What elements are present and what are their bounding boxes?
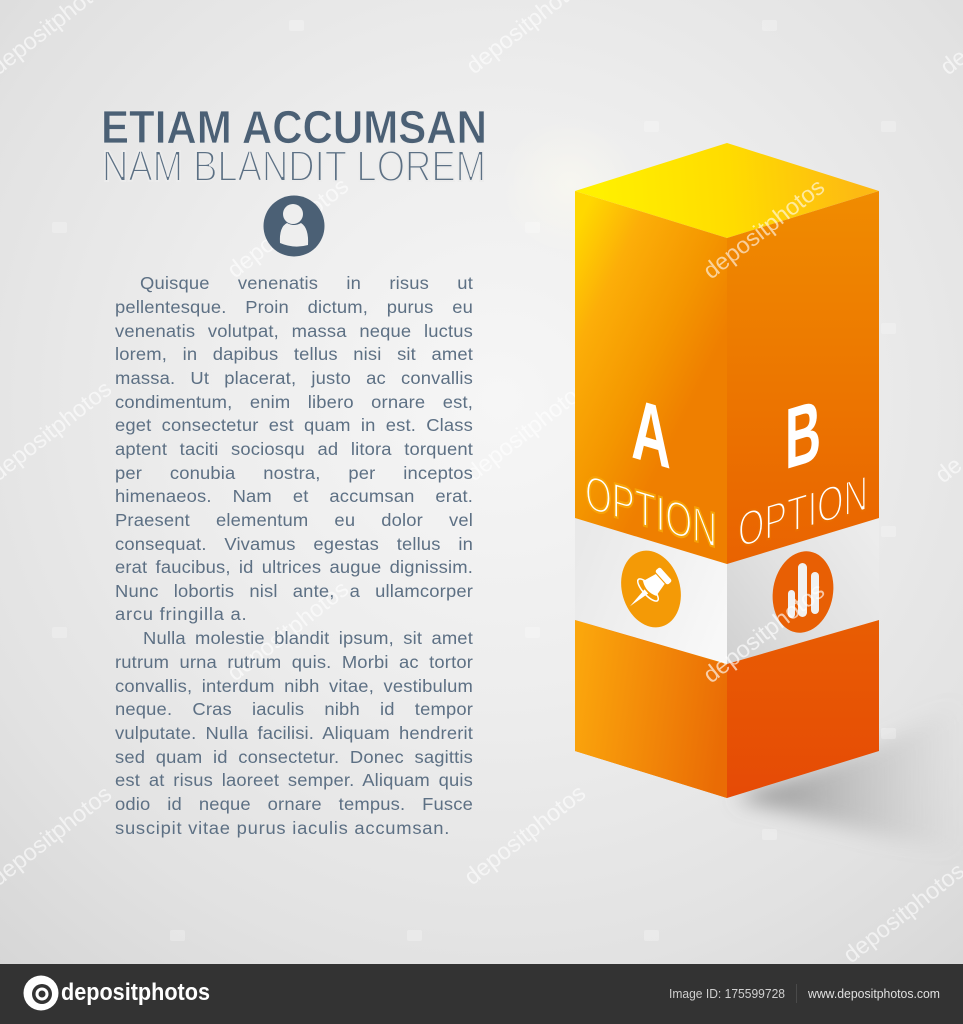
- body text: massa. Ut placerat, justo ac convallis: [115, 368, 473, 388]
- box watermark top: depositphotos: [698, 173, 829, 284]
- body text: pellentesque. Proin dictum, purus eu: [115, 297, 473, 317]
- body text: condimentum, enim libero ornare est,: [115, 392, 473, 412]
- body text: lorem, in dapibus tellus nisi sit amet: [115, 344, 473, 364]
- watermarks: depositphotos: [459, 779, 590, 890]
- body text: himenaeos. Nam et accumsan erat.: [115, 486, 473, 506]
- subtitle: NAM BLANDIT LOREM: [102, 142, 486, 191]
- body text: Nunc lobortis nisl ante, a ullamcorper: [115, 581, 473, 601]
- logo mark: [24, 976, 58, 1010]
- logo wordmark: depositphotos: [61, 979, 210, 1006]
- body text: neque. Cras iaculis nibh id tempor: [115, 699, 473, 719]
- watermarks: depositphotos: [222, 575, 353, 686]
- watermark camera marks: [52, 20, 896, 941]
- body text: Praesent elementum eu dolor vel: [115, 510, 473, 530]
- body text: venenatis volutpat, massa neque luctus: [115, 321, 473, 341]
- body text: arcu fringilla a.: [115, 604, 247, 624]
- letter A: A: [631, 381, 671, 488]
- icon: bar chart: [766, 546, 840, 638]
- white band right: [727, 518, 879, 664]
- watermarks: depositphotos: [461, 375, 592, 486]
- icon: person: [264, 196, 324, 256]
- option label A: OPTION: [585, 464, 717, 558]
- body text: est at risus laoreet semper. Aliquam quis: [115, 770, 473, 790]
- body text: Nulla molestie blandit ipsum, sit amet: [143, 628, 473, 648]
- footer bar: [0, 964, 963, 1024]
- body text: sed quam id consectetur. Donec sagittis: [115, 747, 473, 767]
- watermarks: depositphotos: [222, 172, 353, 283]
- body text: aptent taciti sociosqu ad litora torquent: [115, 439, 473, 459]
- body text: odio id neque ornare tempus. Fusce: [115, 794, 473, 814]
- image id: Image ID: 175599728: [669, 987, 785, 1001]
- box left face: [575, 191, 727, 798]
- white band left: [575, 518, 727, 664]
- box shadow: [736, 732, 930, 839]
- body text: eget consectetur est quam in est. Class: [115, 415, 473, 435]
- box right face: [727, 191, 879, 798]
- body text: rutrum urna rutrum quis. Morbi ac tortor: [115, 652, 473, 672]
- body text: Quisque venenatis in risus ut: [140, 273, 473, 293]
- website: www.depositphotos.com: [807, 987, 940, 1001]
- body text: convallis, interdum nibh vitae, vestibulum: [115, 676, 473, 696]
- option label B: OPTION: [738, 465, 868, 559]
- body text: per conubia nostra, per inceptos: [115, 463, 473, 483]
- body text: vulputate. Nulla facilisi. Aliquam hendrerit: [115, 723, 473, 743]
- body text: [115, 273, 473, 838]
- body text: suscipit vitae purus iaculis accumsan.: [115, 818, 450, 838]
- 3D orange box: [575, 143, 879, 798]
- box top face: [575, 143, 879, 238]
- box watermark bottom: depositphotos: [698, 577, 829, 688]
- title: ETIAM ACCUMSAN: [101, 101, 487, 153]
- box left face lower part: [575, 620, 727, 798]
- body text: erat faucibus, id ultrices augue dignissim.: [115, 557, 473, 577]
- body text: consequat. Vivamus egestas tellus in: [115, 534, 473, 554]
- icon: pushpin: [612, 544, 690, 634]
- letter B: B: [785, 382, 821, 489]
